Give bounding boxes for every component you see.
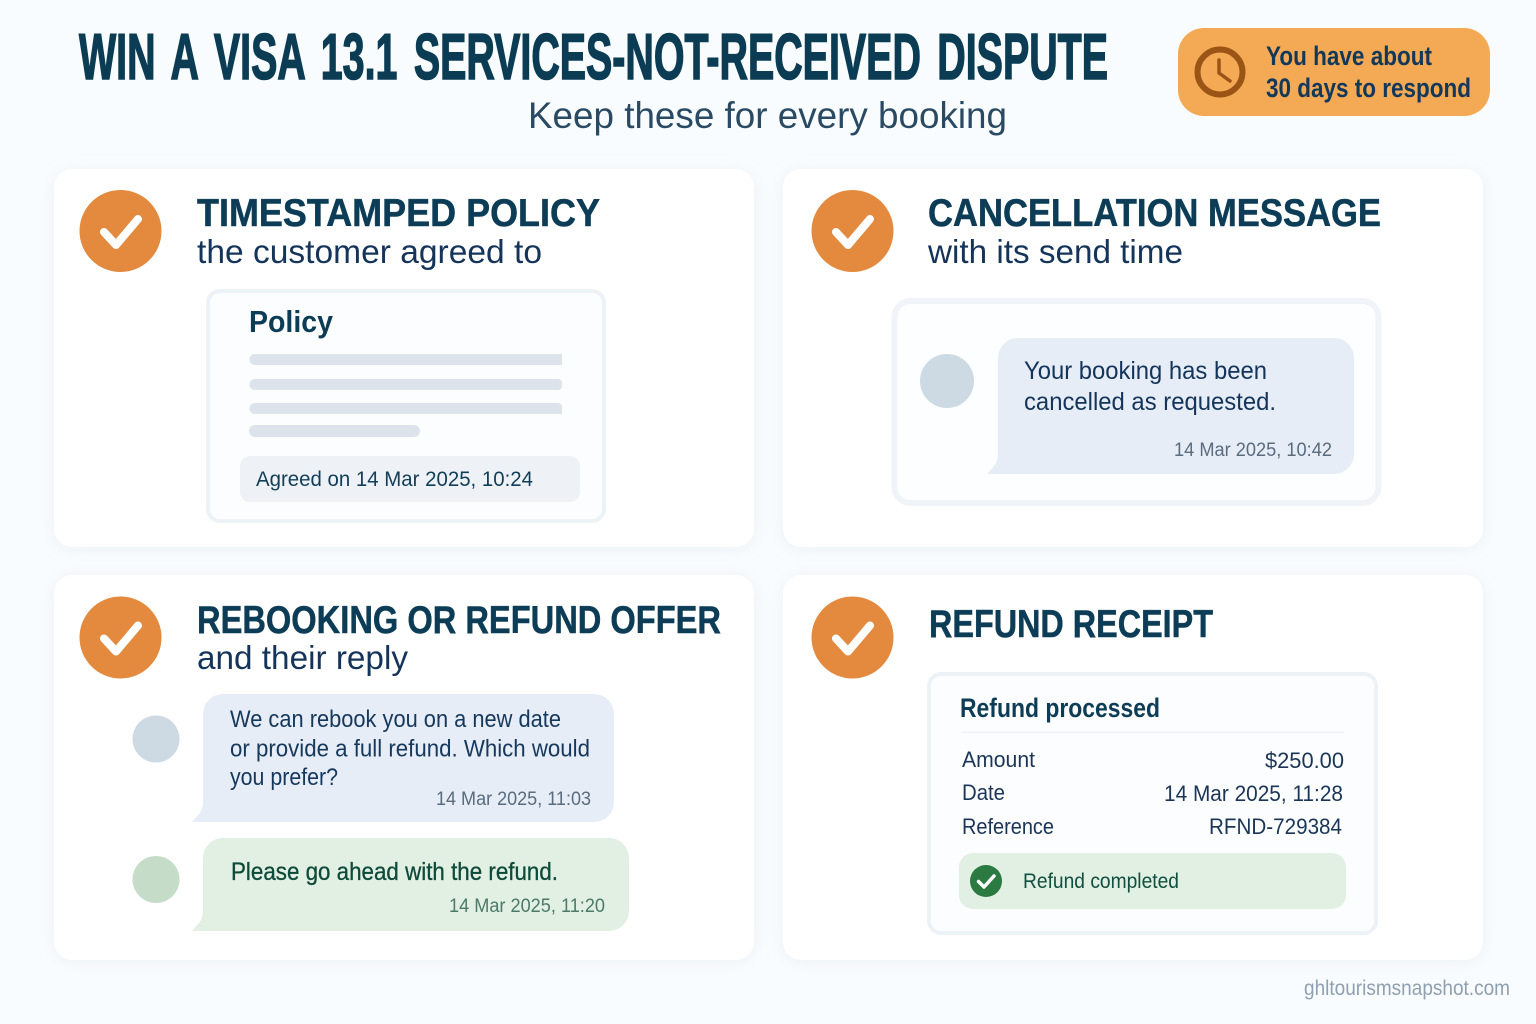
receipt card <box>929 674 1376 933</box>
policy document <box>208 291 604 521</box>
heading: CANCELLATION MESSAGE <box>928 192 1381 235</box>
subheading: and their reply <box>197 639 408 676</box>
source credit: ghltourismsnapshot.com <box>1304 977 1510 1000</box>
agreed timestamp <box>240 456 580 502</box>
heading: TIMESTAMPED POLICY <box>197 192 600 235</box>
receipt title: Refund processed <box>960 693 1160 723</box>
offer bubble: We can rebook you on a new date <box>230 706 561 733</box>
reply bubble <box>192 838 629 931</box>
panel: refund receipt <box>783 575 1483 960</box>
policy title: Policy <box>249 304 334 339</box>
icon: check badge <box>80 596 162 678</box>
icon: clock <box>1198 50 1242 94</box>
message bubble: cancelled as requested. <box>1024 388 1276 416</box>
subheading: with its send time <box>927 233 1183 270</box>
callout text: 30 days to respond <box>1266 73 1471 103</box>
icon: check badge <box>80 190 162 272</box>
receipt rows: Reference <box>962 814 1054 839</box>
offer bubble: you prefer? <box>230 764 338 791</box>
subheading: the customer agreed to <box>197 233 542 270</box>
offer bubble <box>192 694 614 822</box>
icon: green check <box>970 865 1002 897</box>
panel: cancellation message <box>783 169 1483 547</box>
panel: timestamped policy <box>54 169 754 547</box>
receipt rows: 14 Mar 2025, 11:28 <box>1164 781 1343 806</box>
message bubble: 14 Mar 2025, 10:42 <box>1174 440 1332 461</box>
callout text: You have about <box>1266 41 1432 71</box>
status: refund completed: Refund completed <box>1023 870 1179 893</box>
message bubble: Your booking has been <box>1024 357 1267 385</box>
avatar: customer <box>132 856 180 903</box>
status: refund completed <box>959 853 1346 909</box>
receipt rows: RFND-729384 <box>1209 814 1342 839</box>
reply bubble: 14 Mar 2025, 11:20 <box>449 896 605 917</box>
callout text <box>1266 41 1471 103</box>
agreed timestamp: Agreed on 14 Mar 2025, 10:24 <box>256 468 533 491</box>
heading: REFUND RECEIPT <box>929 603 1213 646</box>
receipt rows: $250.00 <box>1265 748 1344 773</box>
icon: check badge <box>812 190 894 272</box>
icon: check badge <box>812 596 894 678</box>
heading: REBOOKING OR REFUND OFFER <box>197 599 721 642</box>
avatar <box>920 354 974 408</box>
message bubble <box>987 338 1354 474</box>
placeholder text lines <box>249 354 562 437</box>
panel: rebooking or refund offer <box>54 575 754 960</box>
receipt rows: Amount <box>962 747 1035 772</box>
receipt rows <box>962 747 1344 839</box>
message frame <box>894 301 1378 503</box>
subtitle: Keep these for every booking <box>528 95 1007 136</box>
avatar: agent <box>132 716 180 762</box>
reply bubble: Please go ahead with the refund. <box>231 858 558 886</box>
receipt rows: Date <box>962 780 1005 805</box>
offer bubble: 14 Mar 2025, 11:03 <box>436 789 591 810</box>
offer bubble: or provide a full refund. Which would <box>230 736 590 762</box>
callout: response deadline <box>1178 28 1490 116</box>
